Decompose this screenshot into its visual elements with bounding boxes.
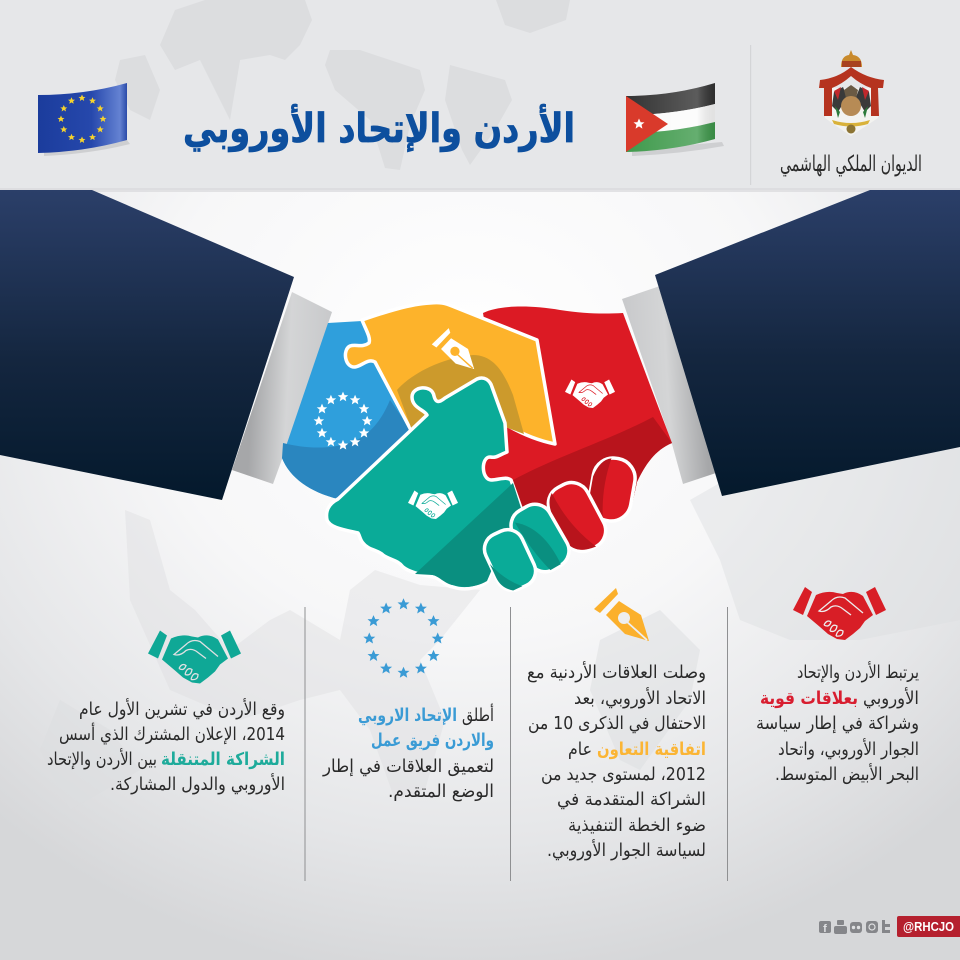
text block: column 1: الأوروبي — [863, 687, 919, 709]
text block: column 1: الجوار الأوروبي، واتحاد — [778, 738, 919, 760]
right cuff — [622, 286, 725, 484]
star — [634, 118, 644, 129]
handshake puzzle illustration — [282, 303, 672, 596]
text block: column 4: الأوروبي والدول المشاركة. — [110, 773, 285, 795]
text block: column 1: يرتبط الأردن والإتحاد — [797, 661, 919, 683]
left sleeve — [0, 190, 332, 500]
text block: column 3 — [322, 703, 494, 802]
text block: column 4: بين الأردن والإتحاد — [47, 748, 157, 770]
title: الأردن والإتحاد الأوروبي — [183, 103, 575, 152]
teal fingers — [479, 498, 575, 596]
text block: column 2: وصلت العلاقات الأردنية مع — [527, 661, 706, 683]
text block: column 2: الاحتفال في الذكرى 10 من — [528, 714, 706, 734]
text block: column 2: 2012، لمستوى جديد من — [541, 765, 706, 785]
teal puzzle piece — [327, 378, 525, 589]
social icons — [819, 920, 890, 935]
red fingers — [542, 455, 638, 558]
icon: red handshake — [793, 587, 886, 640]
text block: column 2 — [527, 661, 706, 861]
blue puzzle piece — [282, 321, 412, 499]
right sleeve — [622, 190, 960, 496]
column dividers — [304, 607, 728, 881]
text block: column 3: والاردن فريق عمل — [371, 731, 494, 751]
handshake icon white — [565, 379, 615, 408]
EU stars on hand — [314, 392, 372, 450]
text block: column 2: عام — [568, 740, 592, 760]
text block: column 3: الوضع المتقدم. — [388, 782, 494, 802]
text block: column 4: الشراكة المتنقلة — [161, 750, 285, 770]
handshake icon white — [408, 490, 458, 519]
icon: EU stars circle — [363, 598, 444, 678]
header separator — [750, 45, 751, 185]
world map background in header — [115, 0, 570, 170]
text block: column 1: وشراكة في إطار سياسة — [756, 714, 919, 734]
icon: teal handshake — [148, 630, 241, 684]
Royal crest — [819, 50, 884, 136]
text block: column 1: البحر الأبيض المتوسط. — [775, 763, 919, 785]
text block: column 2: لسياسة الجوار الأوروبي. — [547, 839, 706, 861]
text block: column 1 — [756, 661, 919, 785]
EU flag — [38, 83, 130, 156]
text block: column 2: ضوء الخطة التنفيذية — [568, 816, 706, 836]
text block: column 3: لتعميق العلاقات في إطار — [322, 757, 494, 777]
text block: column 2: الاتحاد الأوروبي، بعد — [574, 687, 706, 709]
text block: column 4 — [47, 698, 285, 795]
world map background lower — [40, 440, 960, 810]
text block: column 2: اتفاقية التعاون — [597, 740, 706, 760]
text block: column 3: أطلق — [462, 703, 494, 726]
left cuff — [232, 292, 332, 484]
text block: column 3: الإتحاد الاروبي — [358, 706, 457, 726]
handle badge — [897, 916, 960, 937]
text block: column 2: الشراكة المتقدمة في — [557, 790, 706, 810]
header band — [0, 0, 960, 190]
yellow puzzle piece — [345, 303, 555, 444]
handle badge: @RHCJO — [903, 919, 954, 934]
Jordan flag — [626, 83, 724, 156]
text block: column 4: وقع الأردن في تشرين الأول عام — [79, 698, 285, 720]
text block: column 4: 2014، الإعلان المشترك الذي أسس — [59, 722, 285, 745]
pen icon white — [432, 328, 474, 369]
text block: column 1: بعلاقات قوية — [760, 689, 858, 709]
social icons: f — [823, 923, 827, 935]
red puzzle piece — [475, 307, 672, 525]
icon: yellow pen nib — [594, 588, 649, 641]
